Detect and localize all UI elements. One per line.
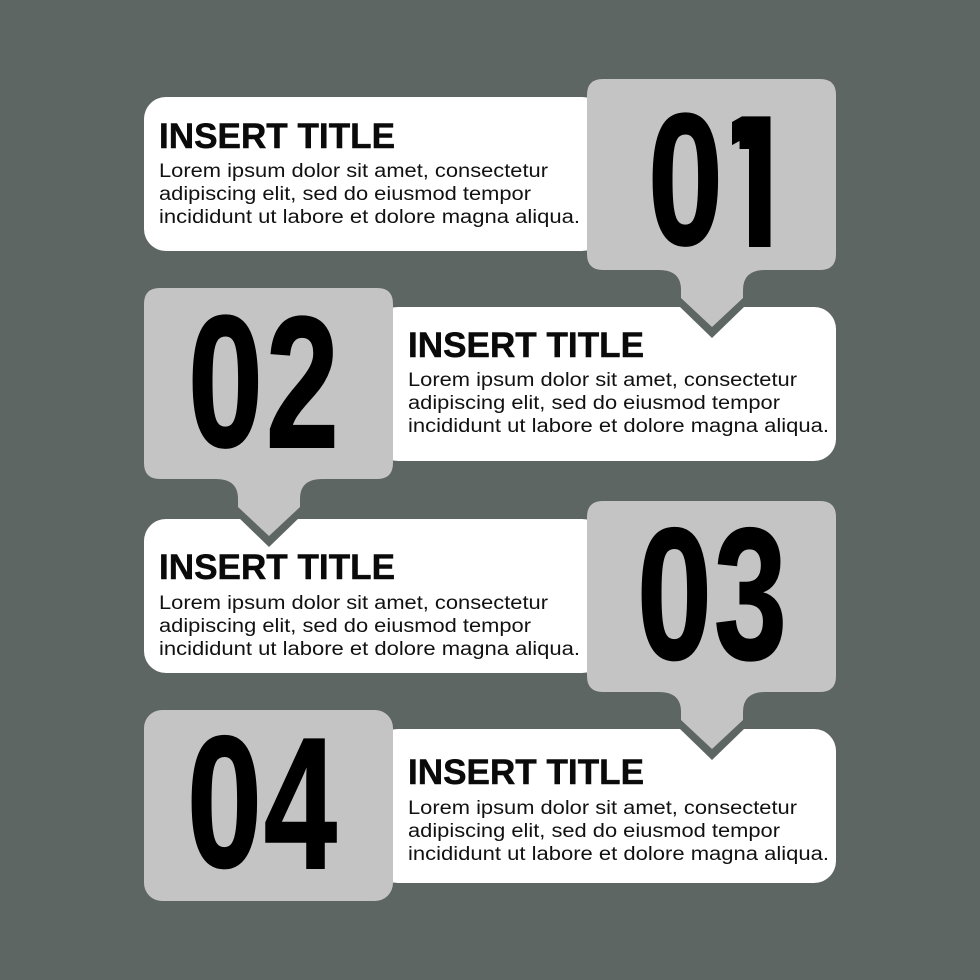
number: 04 [187,698,337,909]
number: 01: 0 [648,75,723,284]
callout: number 03 [587,490,836,760]
heading: step 01: INSERT TITLE [159,117,395,156]
panel: step 04 text box [376,729,836,883]
number: 04: 0 [187,698,262,907]
text block: step 04: adipiscing elit, sed do eiusmod tempor [408,821,781,842]
text block: step 03: Lorem ipsum dolor sit amet, consectetur [159,593,549,614]
number: 02: 2 [266,279,339,488]
panel: step 03 text box [144,519,604,673]
panel: step 01 text box [144,97,604,251]
text block: step 01: Lorem ipsum dolor sit amet, consectetur [159,161,549,182]
text block: step 03: adipiscing elit, sed do eiusmod tempor [159,616,532,637]
text block: step 01: adipiscing elit, sed do eiusmod tempor [159,184,532,205]
number: 02: 0 [188,277,263,486]
text block: step 01: incididunt ut labore et dolore magna aliqua. [159,207,580,228]
callout: number 01 [587,75,836,338]
number: 03: 0 [637,490,712,699]
heading: step 03: INSERT TITLE [159,548,395,587]
heading: step 02: INSERT TITLE [408,326,644,365]
number: 01: 1 [690,77,810,286]
number: 03 [637,490,787,699]
number: 01 [652,112,770,247]
callout: number 02 [144,277,393,547]
panel: step 02 text box [376,307,836,461]
number: 02 [188,277,339,488]
text block: step 04: incididunt ut labore et dolore magna aliqua. [408,844,829,865]
number: 04: 4 [264,700,337,909]
callout: number 04 [144,698,393,909]
number: 03: 3 [714,491,787,699]
heading: step 04: INSERT TITLE [408,753,644,792]
text block: step 03: incididunt ut labore et dolore magna aliqua. [159,639,580,660]
text block: step 04: Lorem ipsum dolor sit amet, consectetur [408,798,798,819]
text block: step 02: adipiscing elit, sed do eiusmod tempor [408,393,781,414]
text block: step 02: Lorem ipsum dolor sit amet, consectetur [408,370,798,391]
text block: step 02: incididunt ut labore et dolore magna aliqua. [408,416,829,437]
